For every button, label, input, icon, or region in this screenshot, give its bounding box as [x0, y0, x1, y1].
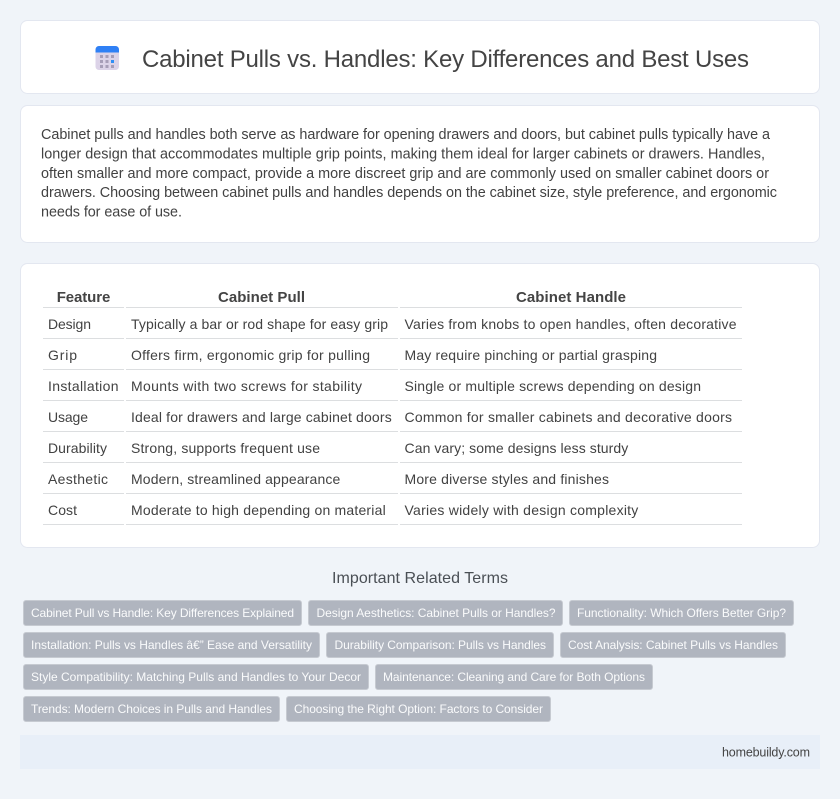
title: Cabinet Pulls vs. Handles: Key Differences and Best Uses [142, 46, 749, 73]
tag: Design Aesthetics: Cabinet Pulls or Handles? [316, 606, 556, 620]
row: installation: Installation [48, 378, 118, 394]
row: grip: May require pinching or partial grasping [404, 347, 657, 363]
row: aesthetic: Modern, streamlined appearance [131, 471, 341, 487]
row: aesthetic [48, 471, 609, 487]
row: cost: Cost [48, 502, 77, 518]
row: grip: Offers firm, ergonomic grip for pulling [131, 347, 370, 363]
tag: Choosing the Right Option: Factors to Consider [294, 702, 543, 716]
row: usage: Usage [48, 409, 88, 425]
row: durability [48, 440, 628, 456]
panel: comparison table [20, 264, 820, 548]
table header [57, 289, 626, 306]
row: design: Design [48, 316, 91, 332]
footer text: homebuildy.com [722, 746, 810, 760]
tag [560, 632, 786, 658]
row: design: Varies from knobs to open handles, often decorative [404, 316, 737, 332]
row: aesthetic: More diverse styles and finishes [404, 471, 609, 487]
tag: Durability Comparison: Pulls vs Handles [334, 638, 546, 652]
row: cost [48, 502, 638, 518]
tag [24, 696, 280, 722]
text block: introduction: often smaller and more compact, provide a more discreet grip and are commonly used on smaller cabinet doors or [41, 166, 769, 182]
table header: Feature [57, 289, 110, 306]
tag: Style Compatibility: Matching Pulls and Handles to Your Decor [31, 670, 361, 684]
row: installation: Single or multiple screws depending on design [404, 378, 701, 394]
row: durability: Durability [48, 440, 107, 456]
text block: introduction: drawers. Choosing between cabinet pulls and handles depends on the cabinet size, style preference, and ergonomic [41, 185, 777, 201]
tags: related terms [24, 600, 794, 722]
row: grip [48, 347, 657, 363]
row: design: Typically a bar or rod shape for easy grip [131, 316, 388, 332]
tag: Cabinet Pull vs Handle: Key Differences Explained [31, 606, 294, 620]
text block: introduction [41, 127, 777, 221]
row: durability: Strong, supports frequent use [131, 440, 320, 456]
tag [376, 664, 652, 690]
row: usage: Ideal for drawers and large cabinet doors [131, 409, 392, 425]
tag [570, 600, 794, 626]
tag [308, 600, 562, 626]
icon: calendar [96, 46, 119, 70]
text block: introduction: needs for ease of use. [41, 205, 182, 221]
row: cost: Moderate to high depending on material [131, 502, 386, 518]
row: grip: Grip [48, 347, 77, 363]
row: cost: Varies widely with design complexity [404, 502, 638, 518]
row: installation: Mounts with two screws for stability [131, 378, 362, 394]
table header: Cabinet Pull [218, 289, 305, 306]
table header: Cabinet Handle [516, 289, 626, 306]
table row lines [43, 308, 742, 524]
tag: Functionality: Which Offers Better Grip? [577, 606, 786, 620]
tag: Cost Analysis: Cabinet Pulls vs Handles [568, 638, 778, 652]
tag: Trends: Modern Choices in Pulls and Handles [31, 702, 272, 716]
tag [286, 696, 550, 722]
row: installation [48, 378, 701, 394]
tag [24, 632, 320, 658]
text block: introduction: Cabinet pulls and handles both serve as hardware for opening drawers and doors, but cabinet pulls typically have a [41, 127, 770, 143]
row: usage: Common for smaller cabinets and decorative doors [404, 409, 732, 425]
panel: header [20, 20, 820, 94]
tag: Maintenance: Cleaning and Care for Both Options [383, 670, 645, 684]
footer [20, 735, 820, 769]
row: durability: Can vary; some designs less sturdy [404, 440, 628, 456]
tag [326, 632, 554, 658]
tag: Installation: Pulls vs Handles â€” Ease and Versatility [31, 638, 312, 652]
row: aesthetic: Aesthetic [48, 471, 108, 487]
row: design [48, 316, 737, 332]
panel: introduction [20, 106, 820, 242]
row: usage [48, 409, 732, 425]
text block: introduction: longer design that accommodates multiple grip points, making them ideal for larger cabinets or drawers. Handles, [41, 146, 765, 162]
heading: related terms: Important Related Terms [332, 570, 508, 587]
tag [24, 600, 302, 626]
tag [24, 664, 368, 690]
